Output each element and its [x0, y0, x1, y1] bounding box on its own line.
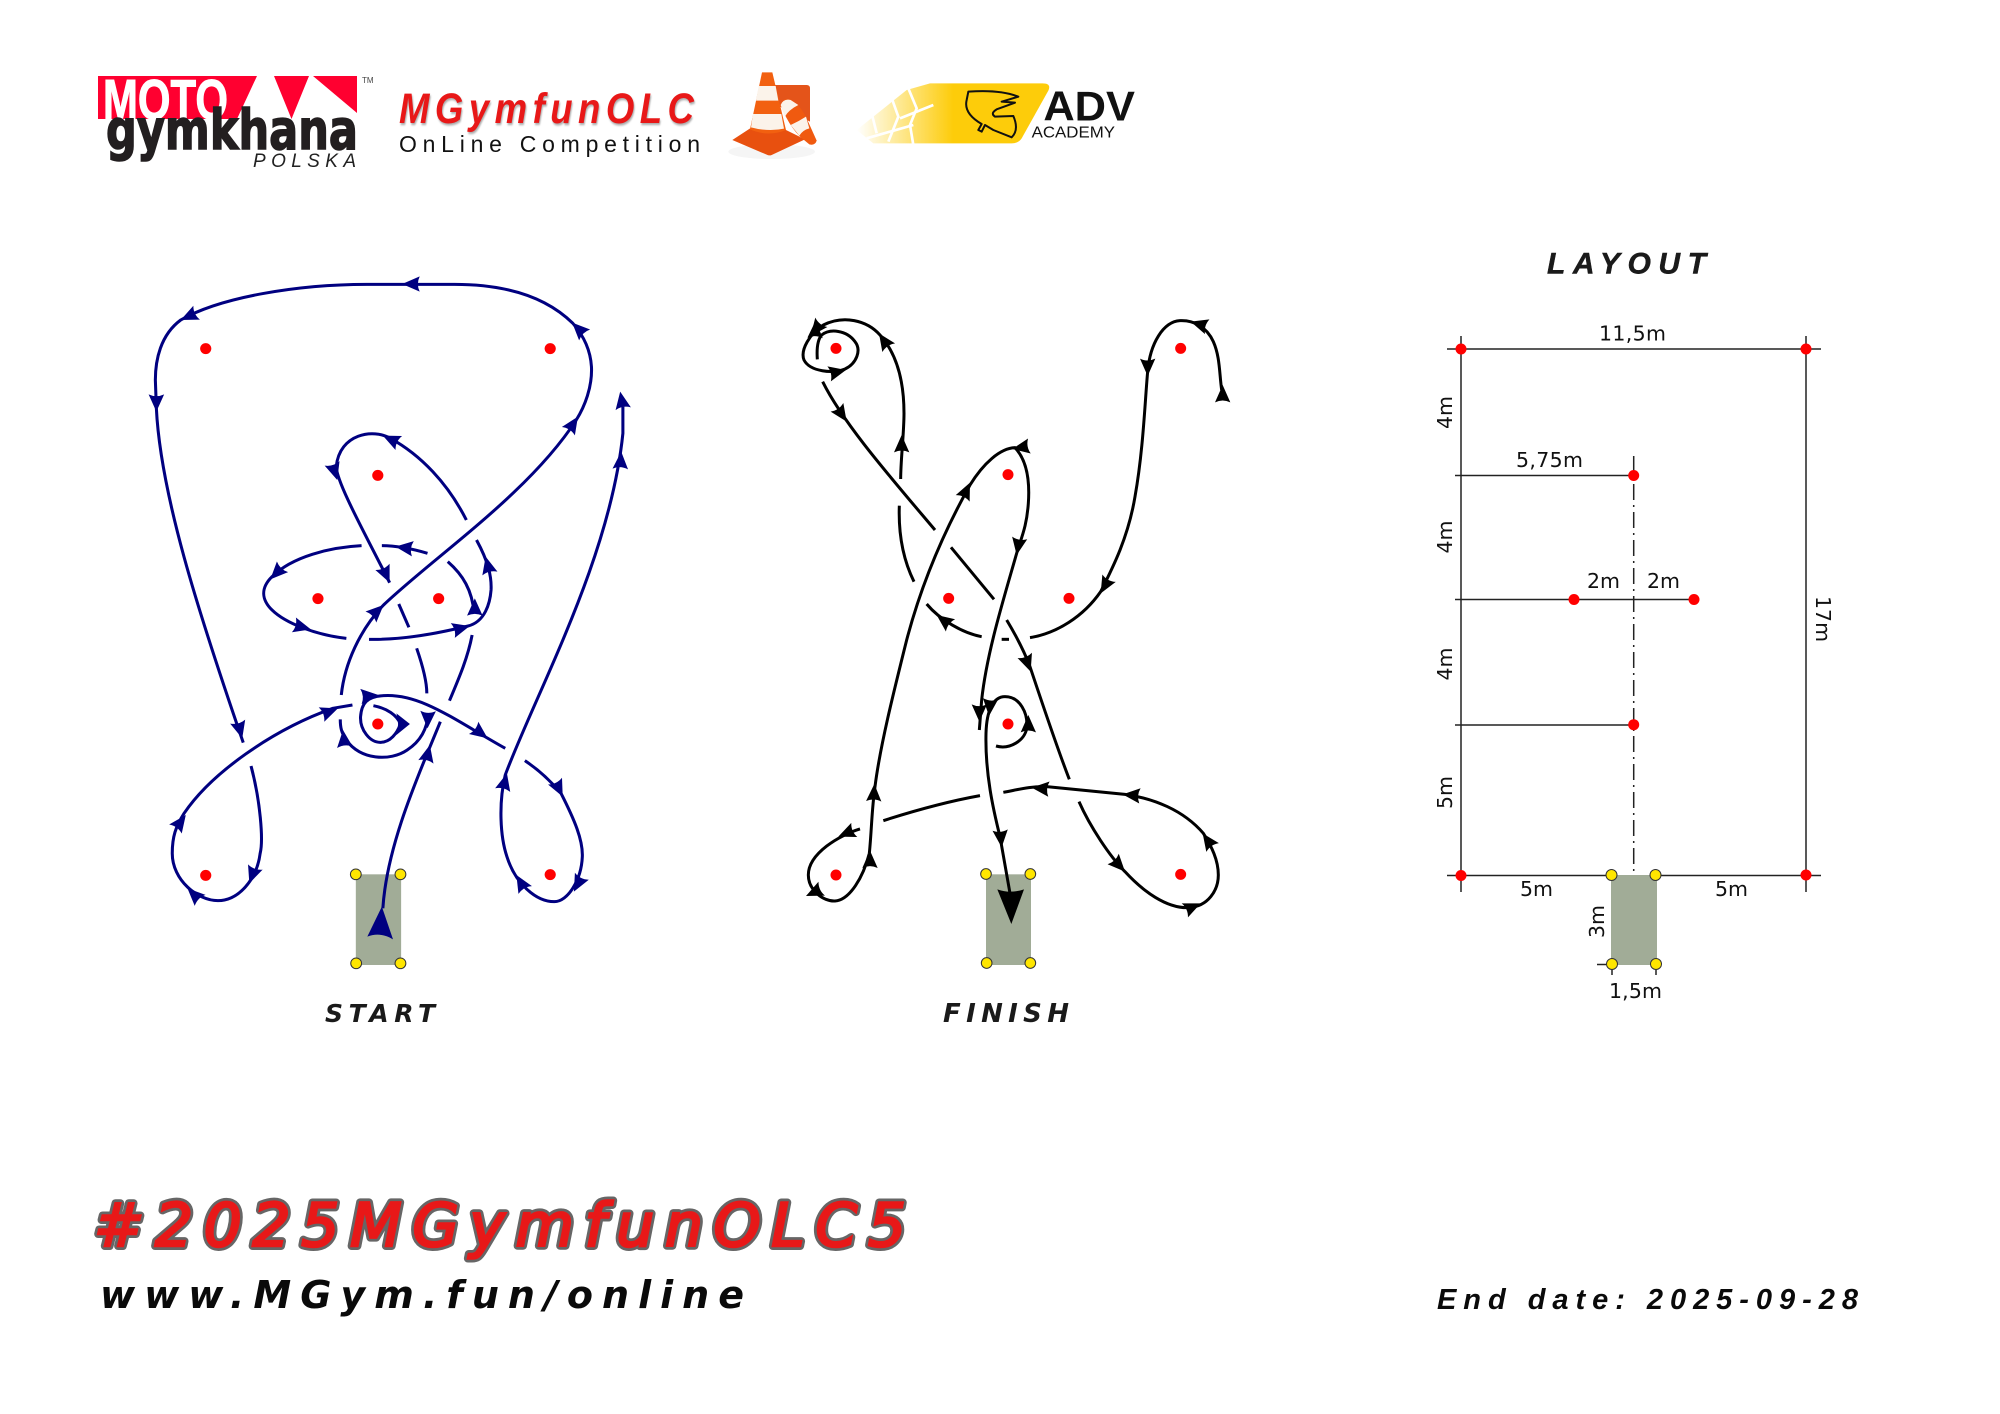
dimension labels: 5,75m	[1516, 448, 1583, 472]
ADV word: ADV	[1043, 83, 1135, 130]
event name: MGymfunOLC OnLine Competition	[399, 85, 700, 157]
dimension labels: 3m	[1585, 905, 1609, 938]
back plate	[775, 85, 810, 122]
large start arrow	[367, 907, 393, 939]
large finish arrow	[997, 889, 1024, 924]
route line	[155, 284, 623, 908]
hashtag title	[94, 1191, 906, 1261]
main cone	[750, 72, 786, 134]
panel: START route	[149, 276, 631, 969]
label: START: START	[325, 999, 437, 1028]
panel: FINISH route	[803, 314, 1230, 968]
dimension labels: 5m	[1715, 877, 1748, 901]
heading MGymfunOLC: MGymfunOLC	[399, 85, 695, 133]
logo word MOTO: MOTO	[103, 68, 228, 132]
direction arrows	[803, 314, 1230, 917]
dimension labels: 17m	[1811, 596, 1835, 642]
helmet	[966, 91, 1018, 137]
ACADEMY word: ACADEMY	[1032, 124, 1115, 141]
finish box	[986, 874, 1031, 965]
direction arrows	[149, 276, 631, 906]
dimension labels: 5m	[1433, 776, 1457, 809]
icon: traffic cones	[728, 72, 817, 159]
tipped cone bands	[781, 100, 809, 136]
dimension labels: 11,5m	[1599, 322, 1666, 346]
gate corners	[1606, 870, 1662, 970]
dimension labels: 2m	[1587, 569, 1620, 593]
panel: layout dimensions diagram	[1433, 322, 1835, 1003]
end date: End date: 2025-09-28	[1437, 1284, 1859, 1316]
logo: Moto Gymkhana Polska	[98, 68, 374, 172]
cones	[200, 343, 556, 881]
dimension labels: 4m	[1433, 396, 1457, 429]
tipped cone	[781, 99, 817, 145]
tile lines	[867, 88, 933, 145]
dimension labels: 4m	[1433, 520, 1457, 554]
dimension labels: 4m	[1433, 647, 1457, 680]
dimension lines	[1447, 336, 1821, 975]
subheading: OnLine Competition	[399, 131, 700, 157]
logo word POLSKA: POLSKA	[253, 151, 356, 172]
logo red shapes	[98, 76, 357, 119]
start box corners	[350, 869, 406, 969]
logo trademark: TM	[362, 76, 374, 85]
dimension labels: 2m	[1647, 569, 1680, 593]
cones	[1456, 344, 1812, 881]
heading: LAYOUT: LAYOUT	[1547, 248, 1709, 280]
dimension labels	[1433, 322, 1835, 1003]
dimension labels: 5m	[1520, 877, 1553, 901]
route line	[803, 320, 1222, 908]
finish box corners	[981, 869, 1036, 968]
start box	[356, 874, 401, 965]
logo: ADV Academy	[857, 83, 1135, 145]
title fill: #2025MGymfunOLC5	[94, 1191, 906, 1261]
title outline: #2025MGymfunOLC5	[94, 1191, 906, 1261]
cones	[830, 343, 1186, 880]
dimension labels: 1,5m	[1609, 979, 1662, 1003]
cone shadow	[728, 144, 815, 159]
yellow band	[857, 83, 1049, 143]
main cone bands	[751, 86, 784, 130]
label: FINISH: FINISH	[943, 999, 1069, 1029]
cone base	[732, 127, 805, 155]
website url: www.MGym.fun/online	[100, 1273, 744, 1317]
logo word gymkhana: gymkhana	[106, 98, 358, 162]
gate box	[1611, 875, 1657, 965]
